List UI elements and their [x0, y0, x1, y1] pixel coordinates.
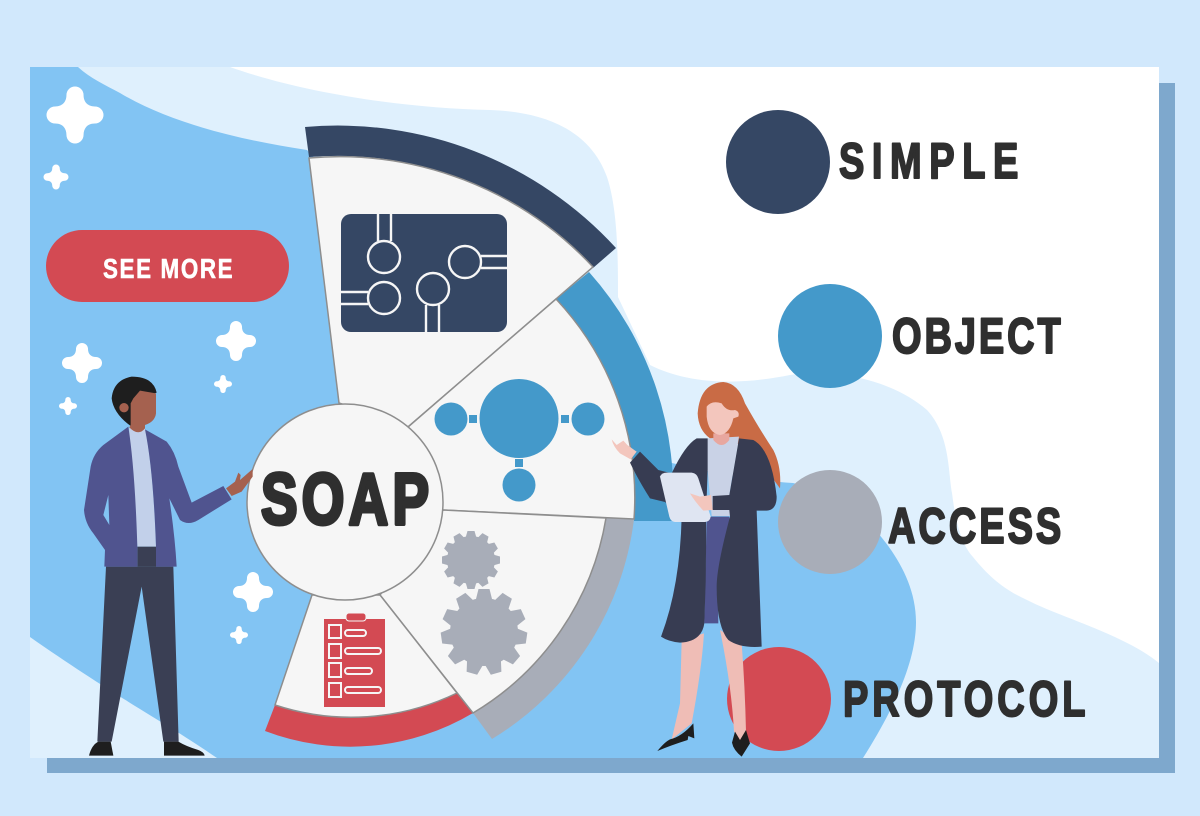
band: red	[265, 693, 473, 747]
legend: protocol label: PROTOCOL	[843, 672, 1085, 727]
SOAP wheel	[247, 126, 673, 747]
segment: top	[309, 157, 593, 427]
panel shadow	[47, 83, 1175, 773]
icon: circuit board	[341, 214, 507, 332]
hub label: SOAP	[261, 459, 429, 540]
button: see more: SEE MORE	[103, 254, 233, 285]
band: gray	[473, 518, 634, 739]
band: dark navy	[305, 126, 616, 268]
segment: blue network	[408, 299, 635, 519]
button: see more	[46, 230, 289, 302]
legend: object	[778, 284, 1061, 388]
segment: checklist	[275, 595, 457, 717]
legend: access	[778, 470, 1061, 574]
figure: man	[84, 377, 253, 756]
center hub circle	[247, 404, 443, 600]
legend: simple: SIMPLE	[839, 134, 1018, 189]
legend: access: ACCESS	[888, 499, 1061, 554]
legend: object: OBJECT	[892, 309, 1061, 364]
white panel	[30, 67, 1159, 758]
decorative sparkles	[44, 86, 273, 644]
legend circle: protocol	[727, 647, 831, 751]
segment: gears	[380, 510, 606, 713]
icon: checklist clipboard	[324, 613, 385, 707]
band: blue	[556, 272, 673, 521]
icon: blue network nodes	[434, 379, 604, 502]
figure: woman	[612, 382, 780, 757]
light blue background blob	[30, 67, 1159, 758]
legend: simple	[726, 110, 1018, 214]
icon: gears	[440, 531, 528, 676]
mid blue background blob	[30, 67, 916, 758]
